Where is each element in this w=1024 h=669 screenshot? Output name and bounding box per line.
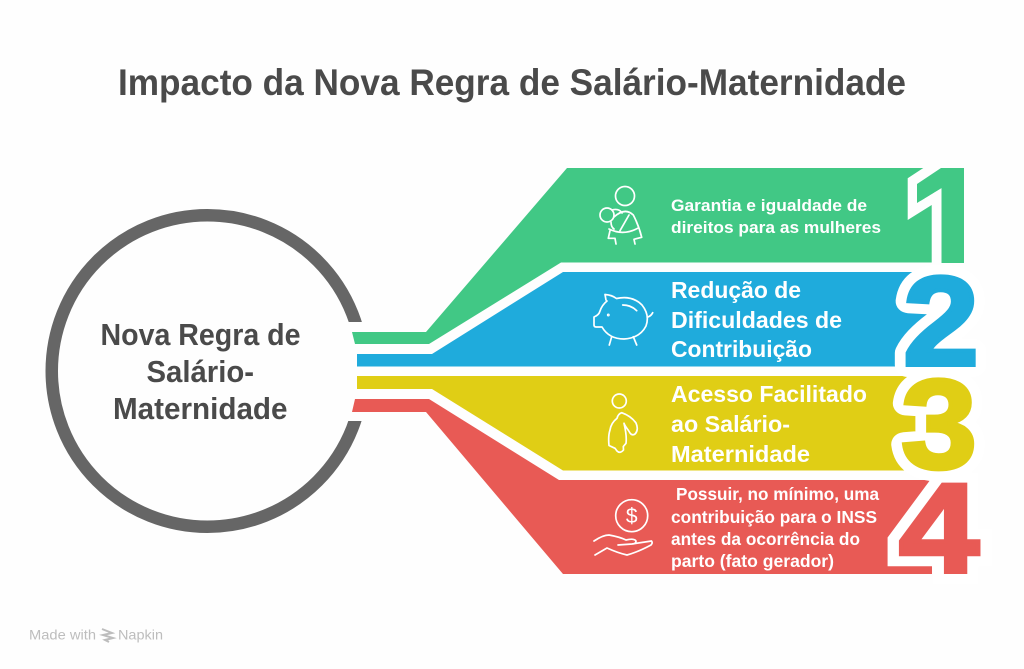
text: possuir: Possuir, no mínimo, uma [676,484,879,504]
icon: pregnant woman [609,394,637,452]
text: acesso [671,381,867,467]
text: reducao: Contribuição [671,336,812,362]
text: possuir: contribuição para o INSS [671,507,877,527]
icon: hand with coin [594,500,652,555]
text: possuir: parto (fato gerador) [671,551,834,571]
central circle [52,215,363,527]
number 3: 3 [901,353,977,495]
number 4: 4 [899,457,979,599]
footer: made with napkin: Napkin [118,626,163,642]
text: reducao: Redução de [671,277,801,303]
circle label: Nova Regra de [100,318,300,352]
number 4: 4 [899,457,979,599]
title: Impacto da Nova Regra de Salário-Maternidade [118,62,906,103]
number 2: 2 [903,250,979,392]
panel: blue band [357,272,932,366]
circle label [100,318,300,426]
text: acesso: ao Salário- [671,411,790,437]
circle label: Maternidade [113,392,288,426]
panel: red band [352,399,932,574]
text: reducao [671,277,842,362]
text: acesso: Maternidade [671,441,810,467]
text: garantia [671,196,881,237]
footer: made with napkin: Made with [29,626,96,642]
text: acesso: Acesso Facilitado [671,381,867,407]
number 3: 3 [901,353,977,495]
number 2: 2 [903,250,979,392]
text: possuir [671,484,879,571]
icon: mother and baby [600,186,642,244]
text: possuir: antes da ocorrência do [671,529,860,549]
panel: yellow band [357,376,932,470]
icon: hand with coin: $ [626,505,638,528]
text: reducao: Dificuldades de [671,307,842,333]
icon: piggy bank [594,294,653,345]
icon: napkin logo [102,629,113,642]
panel: green band [352,168,932,344]
footer: made with napkin [29,626,163,642]
number 1: 1 [912,147,983,289]
circle label: Salário- [146,355,254,389]
text: garantia: Garantia e igualdade de [671,196,867,215]
text: garantia: direitos para as mulheres [671,218,881,237]
